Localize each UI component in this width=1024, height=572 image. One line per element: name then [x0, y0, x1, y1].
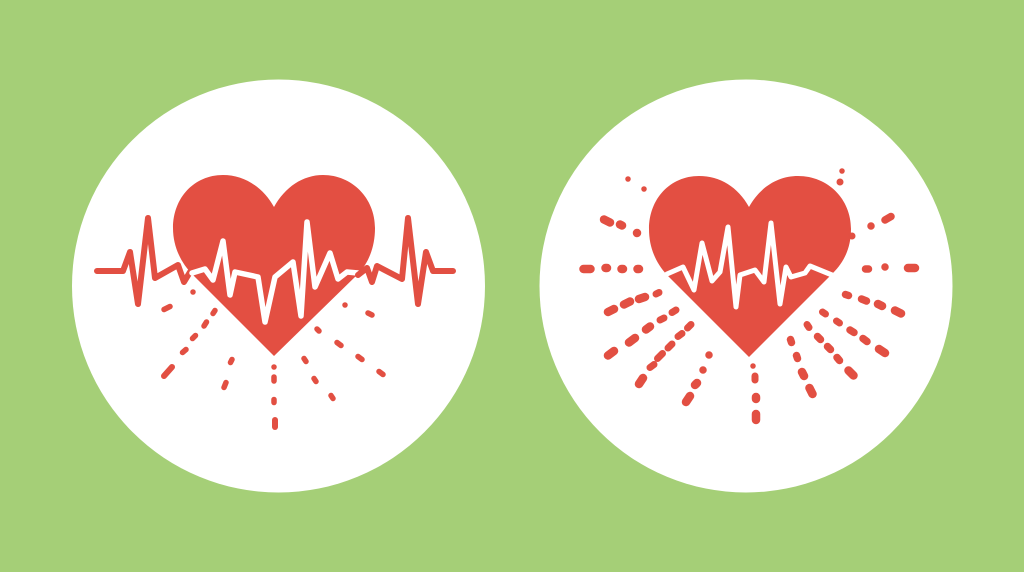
white circle left	[72, 80, 485, 492]
panel: left heart badge	[72, 80, 485, 492]
pulse line right inner	[667, 223, 832, 307]
pulse line right outer	[358, 218, 453, 304]
heart right	[649, 176, 851, 357]
radiating dots left	[164, 292, 383, 427]
pulse line left inner	[192, 222, 358, 322]
pulse line left outer	[97, 218, 190, 304]
white circle right	[540, 80, 952, 492]
heart left	[173, 175, 375, 356]
radiating dots right	[584, 171, 915, 420]
panel: right heart badge	[540, 80, 952, 492]
